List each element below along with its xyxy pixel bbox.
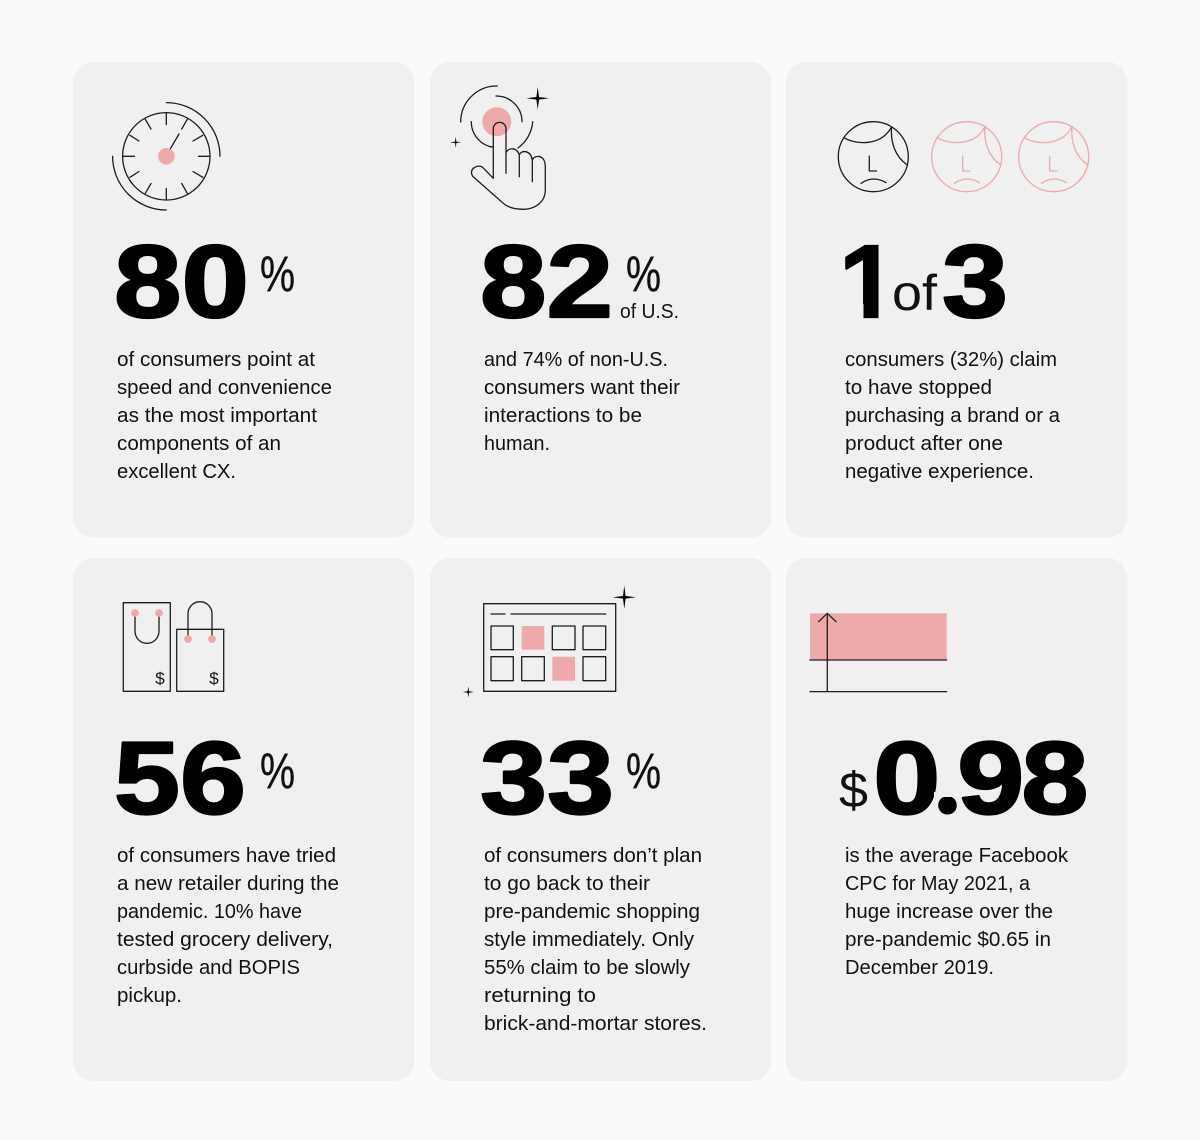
icon: sad face pink one bbox=[932, 122, 1002, 192]
text: 1 of 3 description: to have stopped bbox=[845, 376, 992, 399]
stat: 80%: 80 bbox=[114, 224, 249, 339]
stat: 1 of 3: 3 bbox=[942, 224, 1008, 339]
text: 33 percent description: brick-and-mortar stores. bbox=[484, 1012, 707, 1035]
text: 1 of 3 description: negative experience. bbox=[845, 460, 1034, 483]
stat: 82% of U.S.: 82 bbox=[480, 224, 613, 339]
panel: 56 percent new retailer bbox=[73, 558, 414, 1081]
panel: 33 percent shopping style bbox=[430, 558, 771, 1081]
text: 80 percent description: of consumers point at bbox=[117, 348, 315, 371]
text: $0.98 description: CPC for May 2021, a bbox=[845, 872, 1031, 895]
text: 82 percent description bbox=[484, 348, 680, 455]
text: $0.98 description: pre-pandemic $0.65 in bbox=[845, 928, 1051, 951]
stat: 1 of 3 bbox=[845, 244, 1005, 320]
text: $0.98 description: is the average Facebook bbox=[845, 844, 1069, 867]
stat: 80%: % bbox=[260, 246, 295, 302]
stat: 56%: % bbox=[260, 743, 295, 799]
stat: 82% of U.S.: % bbox=[626, 246, 661, 302]
text: $0.98 description: December 2019. bbox=[845, 956, 994, 979]
stat: 80% bbox=[114, 224, 295, 339]
text: $0.98 description: huge increase over the bbox=[845, 900, 1053, 923]
text: 1 of 3 description: consumers (32%) claim bbox=[845, 348, 1057, 371]
text: 82 percent description: human. bbox=[484, 432, 550, 455]
text: 1 of 3 description bbox=[845, 348, 1061, 483]
icon: rising bar with arrow bbox=[810, 613, 947, 692]
stat: $0.98: 0.98 bbox=[873, 721, 1088, 836]
stat: 33%: % bbox=[626, 743, 661, 799]
text: 56 percent description: tested grocery delivery, bbox=[117, 928, 333, 951]
icon: sad face pink two bbox=[1019, 122, 1089, 192]
stat: 33%: 33 bbox=[480, 720, 614, 836]
stat: 1 of 3: of bbox=[892, 265, 937, 321]
icon: speedometer gauge bbox=[113, 103, 220, 210]
stat: 82% of U.S. bbox=[480, 224, 679, 339]
text: 82 percent description: interactions to be bbox=[484, 404, 642, 427]
text: 80 percent description: components of an bbox=[117, 432, 281, 455]
panel: 82 percent human interactions bbox=[430, 62, 771, 538]
text: 56 percent description bbox=[117, 844, 339, 1007]
icon: calendar with sparkles bbox=[463, 586, 636, 698]
text: 82 percent description: and 74% of non-U.S. bbox=[484, 348, 668, 371]
stat: 82% of U.S.: of U.S. bbox=[620, 300, 679, 323]
text: 1 of 3 description: purchasing a brand or a bbox=[845, 404, 1061, 427]
text: 82 percent description: consumers want their bbox=[484, 376, 680, 399]
panel: $0.98 Facebook CPC bbox=[786, 558, 1128, 1081]
stat: 1 of 3: 1 bbox=[839, 224, 899, 339]
panel: 1 of 3 negative experience bbox=[786, 62, 1128, 538]
text: 33 percent description: returning to bbox=[484, 984, 596, 1007]
stat: 33% bbox=[480, 720, 661, 836]
text: 56 percent description: a new retailer during the bbox=[117, 872, 339, 895]
text: 33 percent description bbox=[484, 844, 707, 1035]
icon: shopping bags: $ bbox=[155, 669, 165, 688]
icon: three sad faces bbox=[838, 122, 1089, 192]
text: 80 percent description bbox=[117, 348, 332, 483]
icon: shopping bags: $ bbox=[209, 669, 219, 688]
text: 33 percent description: to go back to their bbox=[484, 872, 650, 895]
icon: pointing hand with sparkles bbox=[450, 86, 549, 209]
panel: 80 percent speed and convenience bbox=[73, 62, 414, 538]
text: 80 percent description: speed and convenience bbox=[117, 376, 332, 399]
stat: 56%: 56 bbox=[114, 720, 246, 836]
text: 56 percent description: of consumers have tried bbox=[117, 844, 336, 867]
text: 56 percent description: pandemic. 10% have bbox=[117, 900, 302, 923]
text: $0.98 description bbox=[845, 844, 1069, 979]
text: 33 percent description: 55% claim to be slowly bbox=[484, 956, 691, 979]
stat: 56% bbox=[114, 720, 295, 836]
text: 1 of 3 description: product after one bbox=[845, 432, 1003, 455]
text: 33 percent description: pre-pandemic shopping bbox=[484, 900, 700, 923]
text: 33 percent description: of consumers don’t plan bbox=[484, 844, 702, 867]
icon: shopping bags bbox=[123, 602, 224, 691]
text: 33 percent description: style immediately. Only bbox=[484, 928, 695, 951]
stat: $0.98: $ bbox=[839, 762, 868, 818]
text: 56 percent description: pickup. bbox=[117, 984, 182, 1007]
text: 56 percent description: curbside and BOPIS bbox=[117, 956, 300, 979]
text: 80 percent description: as the most important bbox=[117, 404, 317, 427]
icon: sad face black bbox=[838, 122, 908, 192]
text: 80 percent description: excellent CX. bbox=[117, 460, 236, 483]
stat: $0.98 bbox=[840, 740, 1086, 816]
